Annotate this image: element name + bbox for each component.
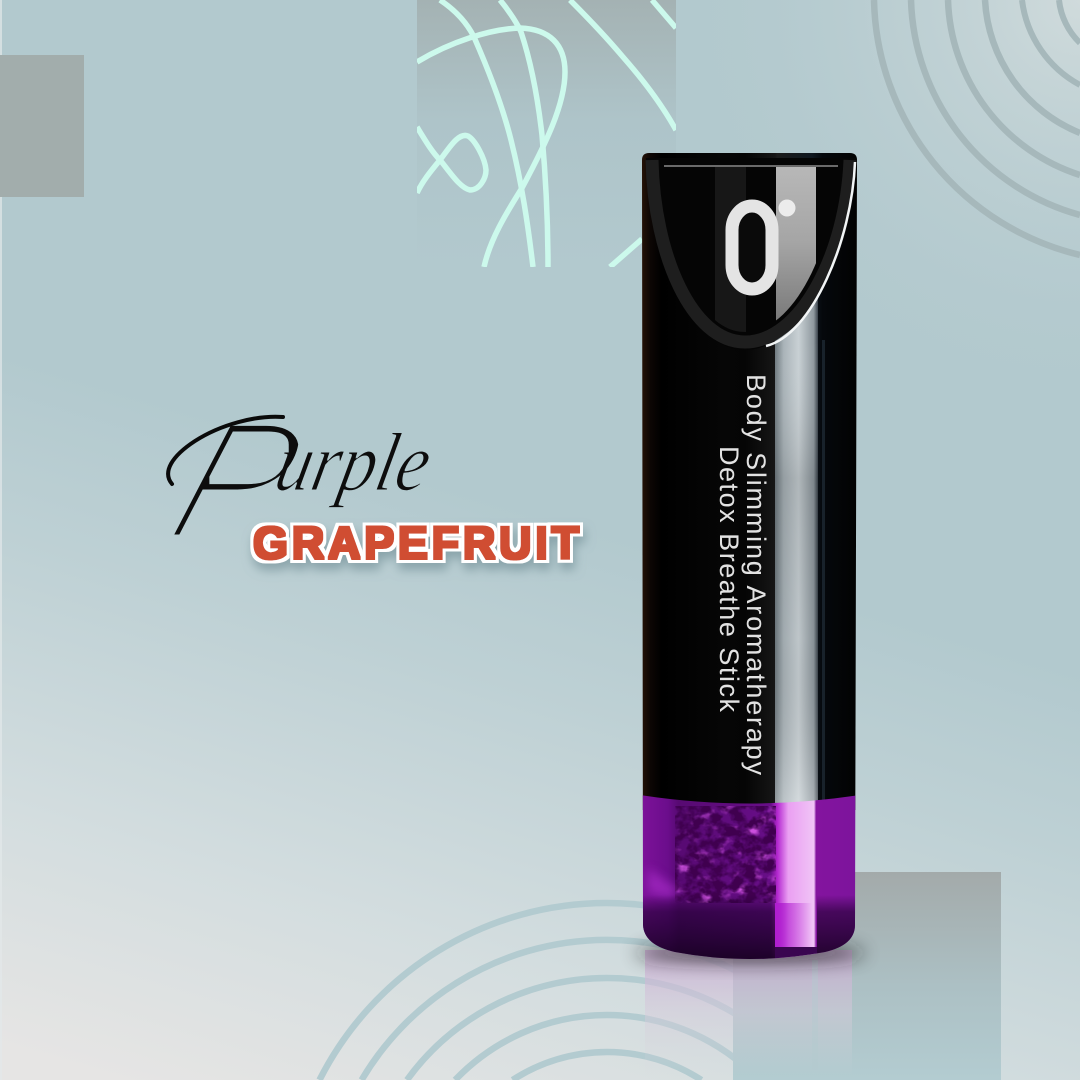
product label text: Body Slimming Aromatherapy [741,374,771,776]
purple base [642,796,856,959]
product reflection [645,950,852,1078]
grey block: lower right [733,872,1001,1080]
product label text [714,374,771,776]
scribble panel: top centre [417,0,676,267]
title: Purple: urple [268,416,440,508]
title: GRAPEFRUIT: GRAPEFRUIT [253,518,579,568]
bottle body [640,150,860,810]
product label text: Detox Breathe Stick [714,446,744,712]
concentric arcs: top right [874,0,1080,255]
product: aromatherapy stick [640,150,860,970]
cap shield [646,158,856,350]
logo: zero with degree dot [732,200,796,289]
concentric arcs: bottom centre [320,903,894,1080]
title: Purple: P [150,386,323,574]
title: Purple [150,386,440,574]
silver highlight stripe [775,280,825,810]
product shadow [635,944,865,962]
cap highlight [776,166,816,336]
grey square: upper left [0,55,84,197]
